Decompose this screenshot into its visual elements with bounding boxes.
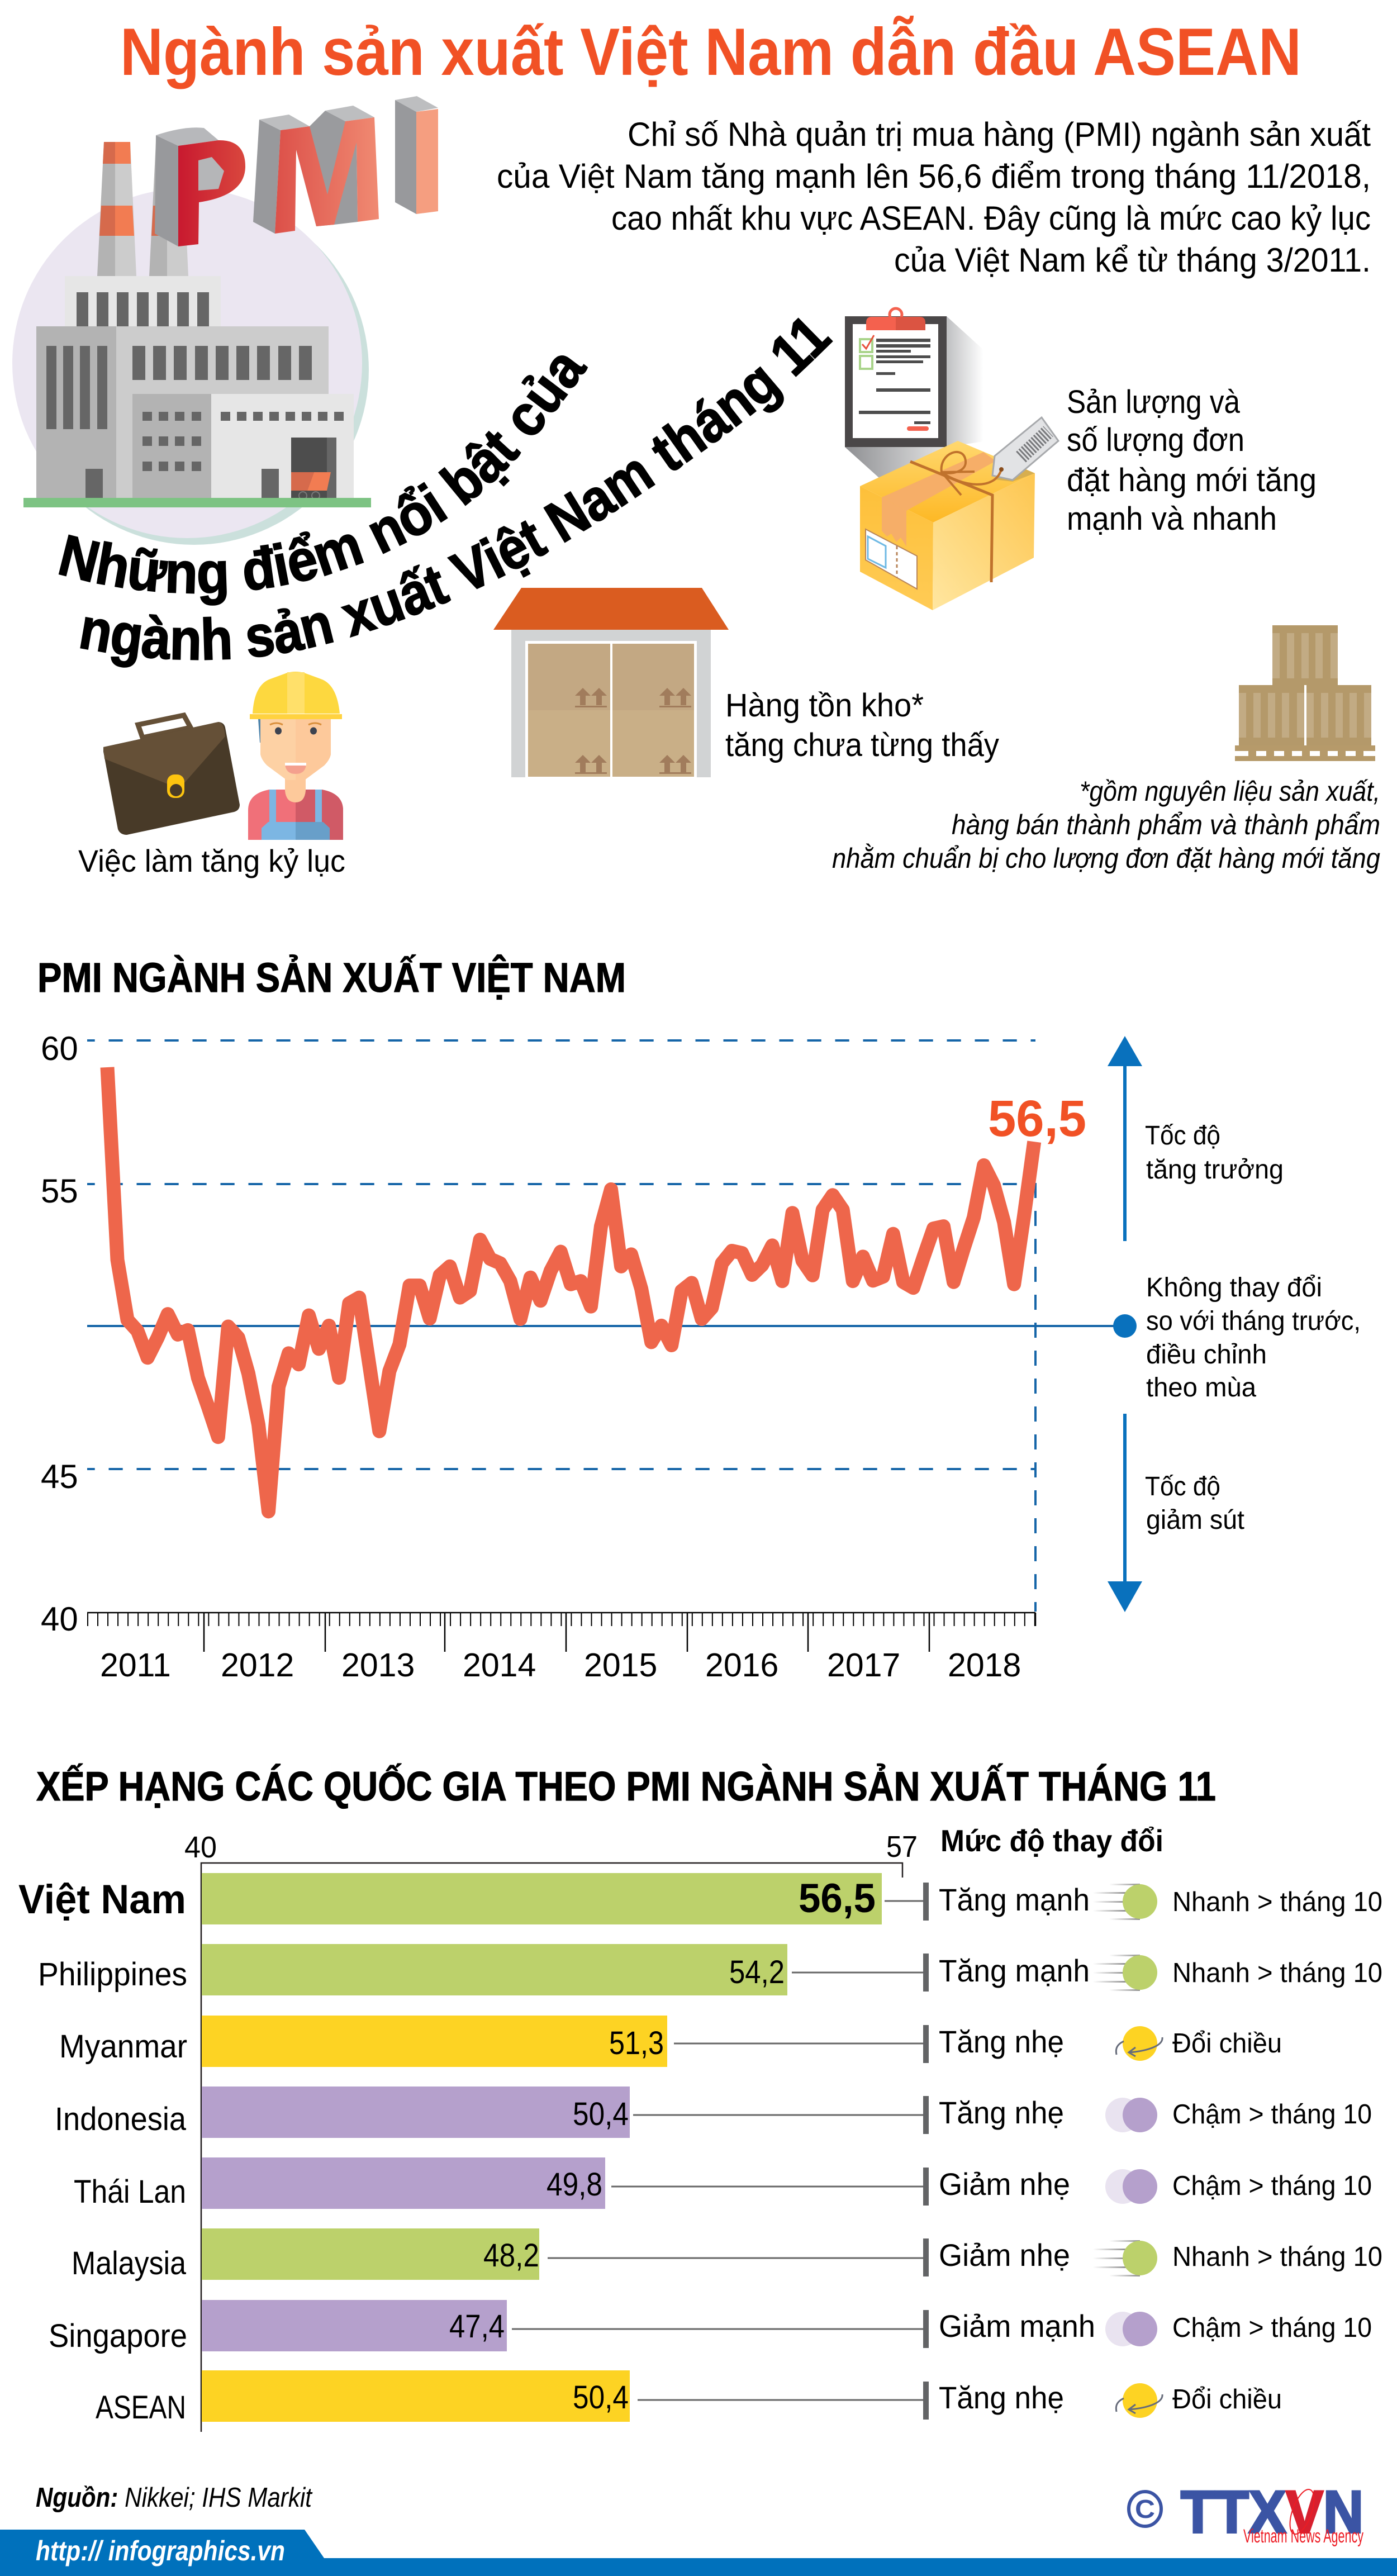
change: Thái Lan: Chậm > tháng 10 bbox=[1172, 2171, 1372, 2201]
text: output and new orders: đặt hàng mới tăng bbox=[1067, 462, 1317, 498]
row: Philippines bbox=[38, 1944, 924, 1995]
axis: scale 40 to 57: 57 bbox=[886, 1830, 918, 1864]
change: Việt Nam: Nhanh > tháng 10 bbox=[1172, 1887, 1382, 1917]
change: ASEAN: Đổi chiều bbox=[1172, 2384, 1282, 2415]
change: Malaysia bbox=[923, 2237, 1382, 2276]
dot: no change marker bbox=[1113, 1314, 1137, 1338]
axis: y labels: 60 bbox=[41, 1030, 78, 1067]
diagonal heading: Những điểm nổi bật của bbox=[58, 355, 588, 606]
intro text block: cao nhất khu vực ASEAN. Đây cũng là mức cao kỷ lục bbox=[611, 199, 1371, 237]
row: ASEAN: 50,4 bbox=[573, 2379, 629, 2416]
row: ASEAN: ASEAN bbox=[96, 2389, 186, 2426]
change: Thái Lan bbox=[923, 2166, 1372, 2206]
panel: change column bbox=[923, 1823, 1382, 2420]
row: Thái Lan bbox=[74, 2157, 924, 2210]
icon: worker bbox=[248, 672, 343, 840]
row: Myanmar: Myanmar bbox=[59, 2028, 187, 2065]
legend text: decline: giảm sút bbox=[1146, 1505, 1244, 1535]
legend text: growth: Tốc độ bbox=[1145, 1121, 1220, 1151]
icon: clipboard bbox=[845, 308, 983, 478]
row: Malaysia bbox=[72, 2228, 924, 2282]
column heading: Mức độ thay đổi bbox=[940, 1823, 1163, 1858]
change: Philippines bbox=[923, 1953, 1382, 1992]
icon: crates on pallet bbox=[1235, 625, 1375, 761]
text: output and new orders: Sản lượng và bbox=[1067, 384, 1241, 420]
row: Myanmar: 51,3 bbox=[609, 2025, 664, 2061]
text: output and new orders: mạnh và nhanh bbox=[1067, 501, 1277, 537]
value label: 56,5 bbox=[988, 1090, 1086, 1147]
icon: warehouse bbox=[493, 588, 729, 777]
text: inventory bbox=[725, 687, 999, 763]
text: record jobs: Việc làm tăng kỷ lục bbox=[78, 843, 345, 878]
row: Malaysia: Malaysia bbox=[72, 2245, 187, 2282]
logo: TTXVN: C bbox=[1135, 2494, 1155, 2523]
row: Singapore: Singapore bbox=[49, 2318, 187, 2354]
axis: y labels bbox=[41, 1030, 78, 1638]
axis: y labels: 40 bbox=[41, 1600, 78, 1638]
axis: year labels: 2018 bbox=[948, 1647, 1021, 1684]
arrow: decline down bbox=[1108, 1414, 1142, 1612]
axis: year labels: 2016 bbox=[705, 1647, 778, 1684]
change: Philippines: Nhanh > tháng 10 bbox=[1172, 1958, 1382, 1988]
axis: y labels: 45 bbox=[41, 1458, 78, 1495]
diagonal heading: ngành sản xuất Việt Nam tháng 11 bbox=[80, 317, 833, 668]
change: Indonesia: Tăng nhẹ bbox=[939, 2095, 1064, 2130]
legend text: no change: điều chỉnh bbox=[1146, 1340, 1267, 1370]
axis: year labels: 2013 bbox=[341, 1647, 415, 1684]
row: Myanmar bbox=[59, 2016, 924, 2067]
legend text: decline: Tốc độ bbox=[1145, 1472, 1220, 1501]
heading: PMI chart: PMI NGÀNH SẢN XUẤT VIỆT NAM bbox=[37, 954, 626, 1001]
data line bbox=[107, 1067, 1034, 1512]
change: Thái Lan: Giảm nhẹ bbox=[939, 2166, 1070, 2202]
text: output and new orders bbox=[1067, 384, 1317, 537]
row: Indonesia bbox=[55, 2087, 924, 2138]
legend text: no change: so với tháng trước, bbox=[1146, 1306, 1361, 1336]
change: Philippines: Tăng mạnh bbox=[939, 1953, 1090, 1988]
change: Singapore bbox=[923, 2308, 1372, 2348]
legend text: decline bbox=[1145, 1472, 1244, 1535]
icon: 3D letter P bbox=[155, 127, 245, 246]
axis: year labels: 2014 bbox=[463, 1647, 536, 1684]
row: Malaysia: 48,2 bbox=[483, 2237, 539, 2274]
footnote bbox=[832, 776, 1380, 874]
axis: y labels: 55 bbox=[41, 1172, 78, 1210]
change: Singapore: Giảm mạnh bbox=[939, 2308, 1095, 2344]
text: output and new orders: số lượng đơn bbox=[1067, 422, 1244, 458]
bar chart: ranking bbox=[18, 1830, 924, 2432]
row: Singapore: 47,4 bbox=[449, 2308, 505, 2345]
change: Myanmar: Đổi chiều bbox=[1172, 2028, 1282, 2059]
source: Nguồn: Nikkei; IHS Markit bbox=[36, 2483, 313, 2513]
legend text: no change: theo mùa bbox=[1146, 1373, 1256, 1403]
logo: TTXVN: TTXVN bbox=[1181, 2478, 1363, 2545]
row: Thái Lan: 49,8 bbox=[547, 2166, 602, 2203]
arrow: growth up bbox=[1108, 1036, 1142, 1241]
icon: briefcase bbox=[103, 715, 240, 835]
row: Indonesia: Indonesia bbox=[55, 2101, 187, 2137]
change: Myanmar bbox=[923, 2024, 1282, 2063]
axis: scale 40 to 57: 40 bbox=[184, 1831, 217, 1864]
row: Indonesia: 50,4 bbox=[573, 2096, 629, 2132]
change: Việt Nam: Tăng mạnh bbox=[939, 1882, 1090, 1917]
change: Myanmar: Tăng nhẹ bbox=[939, 2024, 1064, 2059]
intro text block bbox=[497, 116, 1371, 279]
icon: 3D letter I bbox=[395, 96, 438, 214]
row: Việt Nam: 56,5 bbox=[799, 1876, 876, 1921]
legend text: growth: tăng trưởng bbox=[1146, 1155, 1284, 1185]
change: Indonesia bbox=[923, 2095, 1372, 2134]
line chart: PMI bbox=[41, 1030, 1125, 1684]
row: Philippines: 54,2 bbox=[729, 1954, 785, 1990]
footer url: http:// infographics.vn bbox=[36, 2535, 285, 2567]
change: Singapore: Chậm > tháng 10 bbox=[1172, 2313, 1372, 2343]
axis: year labels: 2017 bbox=[827, 1647, 900, 1684]
change: Malaysia: Nhanh > tháng 10 bbox=[1172, 2242, 1382, 2272]
axis: year labels: 2011 bbox=[100, 1647, 171, 1684]
row: Singapore bbox=[49, 2300, 924, 2354]
axis: year labels: 2015 bbox=[584, 1647, 657, 1684]
row: Philippines: Philippines bbox=[38, 1956, 187, 1993]
icon: parcel box bbox=[860, 417, 1058, 610]
row: Việt Nam: Việt Nam bbox=[18, 1877, 186, 1922]
change: ASEAN bbox=[923, 2380, 1282, 2420]
axis: scale 40 to 57 bbox=[184, 1830, 918, 2432]
change: Việt Nam bbox=[923, 1882, 1382, 1921]
intro text block: của Việt Nam tăng mạnh lên 56,6 điểm trong tháng 11/2018, bbox=[497, 158, 1371, 195]
icon: PMI factory bbox=[12, 96, 438, 545]
text: inventory: Hàng tồn kho* bbox=[725, 687, 924, 724]
change: Malaysia: Giảm nhẹ bbox=[939, 2237, 1070, 2273]
heading: ranking: XẾP HẠNG CÁC QUỐC GIA THEO PMI NGÀNH SẢN XUẤT THÁNG 11 bbox=[36, 1764, 1216, 1809]
footer band bbox=[0, 2530, 1397, 2576]
change: ASEAN: Tăng nhẹ bbox=[939, 2380, 1064, 2415]
row: Thái Lan: Thái Lan bbox=[74, 2174, 186, 2210]
row: ASEAN bbox=[96, 2370, 924, 2426]
change: Indonesia: Chậm > tháng 10 bbox=[1172, 2099, 1372, 2130]
axis: year labels: 2012 bbox=[221, 1647, 294, 1684]
legend text: no change bbox=[1146, 1273, 1361, 1403]
intro text block: Chỉ số Nhà quản trị mua hàng (PMI) ngành sản xuất bbox=[628, 116, 1371, 153]
icon: 3D letter M bbox=[253, 106, 379, 234]
legend text: no change: Không thay đổi bbox=[1146, 1273, 1322, 1303]
row: Việt Nam bbox=[18, 1873, 924, 1924]
intro text block: của Việt Nam kể từ tháng 3/2011. bbox=[894, 241, 1371, 279]
axis: year labels bbox=[100, 1647, 1021, 1684]
legend text: growth bbox=[1145, 1121, 1284, 1185]
text: inventory: tăng chưa từng thấy bbox=[725, 727, 999, 763]
